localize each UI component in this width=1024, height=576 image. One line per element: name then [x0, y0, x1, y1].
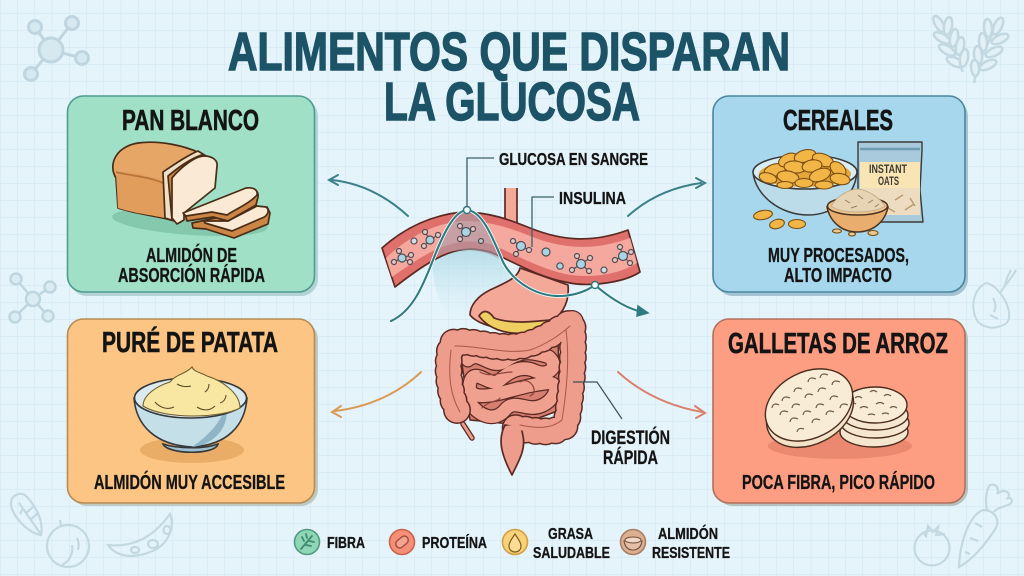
- label: digestion rapida: DIGESTIÓN: [591, 425, 670, 449]
- icon: tomato: [914, 526, 950, 566]
- label: glucosa en sangre: GLUCOSA EN SANGRE: [499, 149, 648, 169]
- text: muy procesados alto impacto: ALTO IMPACTO: [784, 265, 892, 287]
- icon: oats packet: INSTANT: [869, 164, 907, 176]
- icon: pea pod: [108, 514, 172, 556]
- chart: glucose shaded area: [432, 210, 503, 262]
- icon: glucose molecules: [392, 224, 634, 274]
- icon: bread: [111, 142, 270, 240]
- legend item: almidon resistente: ALMIDÓN: [658, 525, 718, 543]
- label: insulina: [532, 188, 626, 247]
- diagram: digestive system: [449, 188, 573, 475]
- legend item: grasa saludable: [502, 526, 610, 562]
- title: [228, 22, 790, 132]
- legend item: almidon resistente: RESISTENTE: [652, 545, 730, 562]
- icon: wheat: [931, 14, 1010, 83]
- icon: mashed potato bowl: [134, 367, 247, 463]
- icon: oats packet: OATS: [878, 176, 899, 188]
- text: almidon de absorcion rapida: ALMIDÓN DE: [146, 243, 237, 267]
- legend item: fibra: [294, 530, 365, 554]
- panel: galletas de arroz: [713, 319, 968, 506]
- legend item: proteina: [390, 530, 487, 554]
- icon: oats packet: [858, 142, 923, 222]
- legend item: proteina: PROTEÍNA: [422, 535, 487, 552]
- icon: rice cakes: [753, 355, 912, 461]
- label: insulina: INSULINA: [559, 188, 626, 208]
- chart: shaded area under curve: [432, 248, 510, 321]
- panel: pure de patata: [68, 319, 318, 506]
- label: digestion rapida: [573, 382, 670, 469]
- icon: large intestine: [449, 322, 573, 475]
- legend item: grasa saludable: GRASA: [548, 526, 593, 543]
- heading: pure de patata: PURÉ DE PATATA: [102, 327, 278, 359]
- icon: carrot: [959, 485, 1012, 567]
- label: glucosa en sangre: [467, 149, 648, 207]
- icon: small intestine: [460, 340, 560, 425]
- legend item: grasa saludable: SALUDABLE: [533, 545, 610, 562]
- heading: cereales: CEREALES: [783, 105, 893, 137]
- text: almidon de absorcion rapida: [118, 243, 265, 287]
- arrow: to pan blanco: [329, 175, 408, 216]
- diagram: blood vessel: [382, 210, 640, 287]
- arrow: to cereales: [628, 178, 705, 216]
- icon: apple: [47, 520, 89, 567]
- icon: cereal bowl: [753, 147, 857, 215]
- legend item: almidon resistente: [620, 525, 730, 562]
- text: muy procesados alto impacto: MUY PROCESADOS,: [768, 245, 909, 267]
- chart: glucose curve: [391, 206, 648, 321]
- panel: pan blanco: [68, 96, 318, 296]
- icon: molecule left: [10, 274, 56, 322]
- label: digestion rapida: RÁPIDA: [603, 446, 658, 469]
- icon: esophagus and stomach: [470, 188, 568, 333]
- heading: pan blanco: PAN BLANCO: [122, 105, 259, 137]
- text: almidon muy accesible: ALMIDÓN MUY ACCESIBLE: [94, 470, 285, 494]
- icon: loose flakes: [753, 209, 878, 236]
- text: muy procesados alto impacto: [768, 245, 909, 287]
- arrow: to pure: [332, 372, 421, 417]
- text: poca fibra pico rapido: POCA FIBRA, PICO RÁPIDO: [742, 471, 935, 494]
- icon: molecule top left: [24, 16, 88, 80]
- text: almidon de absorcion rapida: ABSORCIÓN RÁPIDA: [118, 263, 265, 287]
- icon: oats bowl: [827, 189, 888, 232]
- icon: leaf: [11, 494, 42, 535]
- legend item: fibra: FIBRA: [327, 535, 365, 552]
- title: LA GLUCOSA: [384, 72, 640, 132]
- legend: [294, 525, 730, 562]
- panel: cereales: [713, 96, 968, 296]
- arrow: to galletas: [618, 372, 705, 418]
- title: ALIMENTOS QUE DISPARAN: [228, 22, 790, 82]
- icon: beet: [973, 270, 1016, 328]
